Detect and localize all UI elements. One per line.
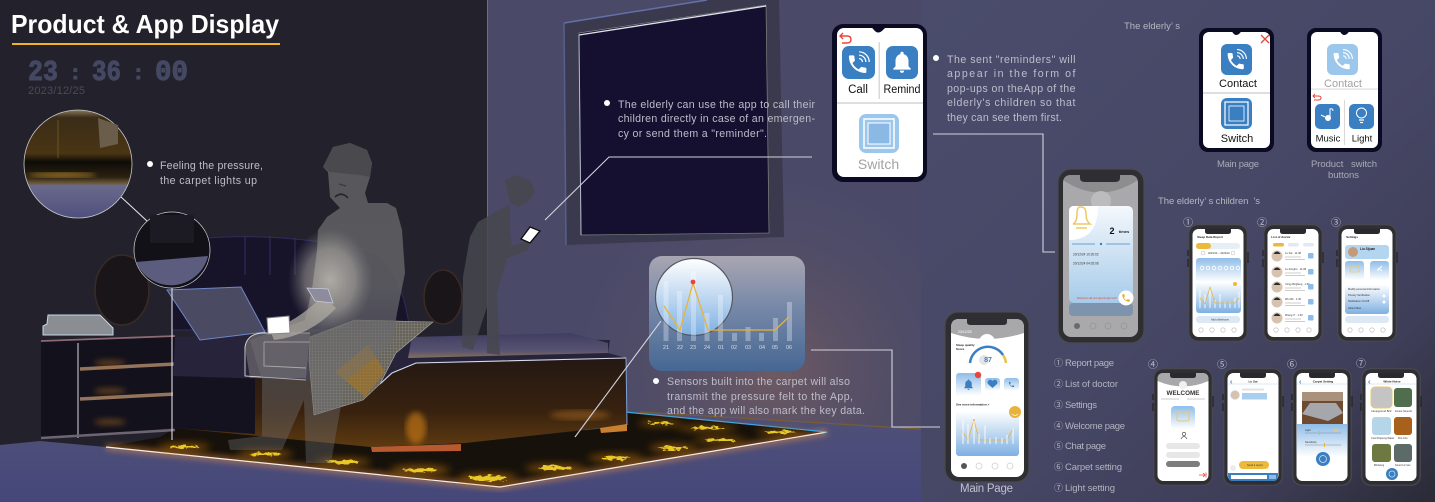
page legend list: ③ [1054, 398, 1063, 411]
phone: carpet setting: Light [1305, 428, 1311, 432]
chart card: pressure data: 05 [772, 345, 778, 351]
title: Product & App Display [11, 9, 280, 39]
phone: report page: Add a Bedroom [1211, 318, 1229, 322]
phone: list of doctor: Lu Zongbo · 11:38 [1285, 267, 1307, 271]
phone: chat page: Lu Sai [1248, 380, 1258, 384]
phone: settings: Notification On/Off [1348, 299, 1369, 303]
phone: elderly main page: Switch [1221, 133, 1253, 145]
arrow: chart to main page [811, 350, 940, 427]
phone: elderly main page: Contact [1219, 78, 1257, 90]
page legend list: ② [1054, 377, 1063, 390]
phone: product switch buttons: Contact [1324, 78, 1362, 90]
phone: carpet setting: Carpet Setting [1313, 380, 1333, 384]
side rail [245, 333, 310, 378]
carpet [106, 412, 827, 487]
books on nightstand [43, 315, 113, 335]
text: reminders: appear in the form of [947, 68, 1076, 80]
chart card: pressure data: 21 [663, 345, 669, 351]
text: carpet lights up: the carpet lights up [160, 175, 257, 187]
phone in hand [521, 227, 540, 243]
chart card: pressure data: 22 [677, 345, 683, 351]
phone: elderly call screen: Switch [858, 156, 899, 172]
phone: light setting: Forest Sounds [1395, 409, 1413, 413]
phone: elderly main page [1199, 28, 1274, 152]
captions: elderly screens: Product switch [1311, 159, 1377, 170]
chart card: pressure data: 04 [759, 345, 765, 351]
phone: carpet setting [1291, 369, 1353, 485]
page legend list [1054, 356, 1125, 494]
phone: list of doctor: List of doctor [1271, 235, 1291, 239]
clock: : [72, 62, 79, 84]
window [564, 0, 784, 245]
page legend list: Chat page [1065, 441, 1106, 452]
phone: product switch buttons [1307, 28, 1382, 152]
text: reminders [933, 54, 1076, 124]
phone: settings: Liu Sijuan [1360, 247, 1375, 251]
phone: popup reminder: 20/12/24 04:02:06 [1073, 262, 1099, 266]
phone: main page: Score [956, 347, 965, 351]
chart card: pressure data: 02 [731, 345, 737, 351]
page legend list: List of doctor [1065, 379, 1118, 390]
standing person [462, 175, 540, 355]
phone: welcome page: WELCOME [1167, 390, 1199, 397]
phone: main page: 20/12/25 [958, 330, 972, 334]
phone: light setting [1360, 369, 1422, 485]
bed [167, 287, 627, 452]
phone: settings: Settings [1346, 235, 1358, 239]
phone: settings: Privacy Verification [1348, 293, 1370, 297]
heading: children's screens: The elderly’ s children 's [1158, 196, 1260, 207]
clock: 36 [92, 56, 121, 89]
seated elderly person [228, 143, 405, 463]
text: elderly call children [604, 99, 815, 140]
chart card: pressure data: 03 [745, 345, 751, 351]
text: sensors: Sensors built into the carpet will also [667, 376, 850, 388]
text: sensors [653, 376, 865, 417]
chart card: pressure data [649, 256, 805, 371]
number labels on phones: ④ [1148, 359, 1158, 371]
phone: carpet setting: Sensitivity [1305, 440, 1317, 444]
phone: product switch buttons: Music [1316, 134, 1341, 144]
text: carpet lights up [147, 160, 263, 187]
page legend list: Carpet setting [1065, 462, 1122, 473]
number labels on phones: ② [1257, 217, 1267, 229]
text: elderly call children: children directly in case of an emergen- [618, 113, 815, 125]
tablet in hand [267, 316, 290, 334]
date: 2023/12/25 [28, 85, 85, 97]
page legend list: Report page [1065, 358, 1114, 369]
page legend list: Welcome page [1065, 421, 1125, 432]
captions: elderly screens [1217, 159, 1377, 181]
page legend list: ⑤ [1054, 439, 1063, 452]
page legend list: ① [1054, 356, 1063, 369]
text: reminders: pop-ups on theApp of the [947, 83, 1076, 95]
number labels on phones: ⑦ [1356, 358, 1366, 370]
headboard [172, 236, 410, 330]
phone: popup reminder: times [1119, 229, 1130, 234]
phone: elderly call screen [832, 24, 927, 182]
chart card: pressure data: 23 [690, 345, 696, 351]
page legend list: Light setting [1065, 483, 1115, 494]
phone: list of doctor: Yang Mingfang · 1:30 [1285, 282, 1310, 286]
phone: light setting: Cool Dripping Water [1371, 436, 1394, 440]
phone: product switch buttons: Light [1352, 134, 1373, 144]
phone: chat page [1222, 369, 1284, 485]
phone: list of doctor: Lu Sai · 11:38 [1285, 251, 1302, 255]
phone: settings: About Mine [1348, 306, 1362, 310]
nightstand [41, 315, 175, 438]
captions: elderly screens: buttons [1328, 170, 1359, 181]
phone: elderly call screen: Remind [884, 84, 920, 96]
phone: list of doctor [1262, 225, 1324, 341]
phone: light setting: Birdsong [1374, 463, 1385, 467]
number labels on phones: ③ [1331, 217, 1341, 229]
speakers [95, 255, 462, 325]
bed base [173, 358, 627, 447]
clock: : [135, 62, 142, 84]
heading: elderly screens: The elderly’ s [1124, 21, 1180, 32]
phone: report page [1187, 225, 1249, 341]
blanket [309, 320, 433, 415]
arrow: app to children's popup [933, 134, 1055, 252]
phone: report page: 2023/12 ~ 2023/12 [1208, 251, 1230, 255]
phone: light setting: White Noise [1383, 380, 1401, 384]
callout: carpet light insets [24, 110, 210, 440]
arrow: phone to app [545, 157, 812, 220]
phone: popup reminder: 20/12/24 10:20:02 [1073, 252, 1099, 256]
text: sensors: and the app will also mark the key data. [667, 405, 865, 417]
text: elderly call children: The elderly can use the app to call their [618, 99, 815, 111]
arrow: carpet to chart [575, 321, 661, 437]
phone: light setting: Fire Fire [1398, 436, 1408, 440]
number labels on phones: ① [1183, 217, 1193, 229]
clock [28, 56, 188, 89]
text: reminders: The sent "reminders" will [947, 54, 1076, 66]
phone: popup reminder: 2 [1109, 226, 1115, 236]
phone: report page: Sleep Data Report [1197, 235, 1223, 239]
number labels on phones: ⑤ [1217, 359, 1227, 371]
phone: settings [1336, 225, 1398, 341]
phone: light setting: Sound of rain [1395, 463, 1411, 467]
phone: light setting: Campground Bird [1371, 409, 1392, 413]
page legend list: ⑥ [1054, 460, 1063, 473]
phone: main page: Sleep quality [956, 343, 975, 347]
text: elderly call children: cy or send them a "reminder". [618, 128, 767, 140]
page legend list: Settings [1065, 400, 1097, 411]
chart card: pressure data: 06 [786, 345, 792, 351]
phone: main page [945, 312, 1029, 482]
text: sensors: transmit the pressure felt to the App, [667, 391, 853, 403]
phone: popup reminder [1058, 169, 1144, 343]
clock: 23 [28, 56, 58, 89]
page legend list: ④ [1054, 419, 1063, 432]
clock: 00 [155, 56, 188, 89]
text: reminders: they can see them first. [947, 112, 1062, 124]
number labels on phones: ⑥ [1287, 359, 1297, 371]
page legend list: ⑦ [1054, 481, 1063, 494]
phone: chat page: Send a report [1247, 463, 1263, 467]
captions: elderly screens: Main page [1217, 159, 1259, 170]
phone: list of doctor: Wu Min · 1:30 [1285, 297, 1302, 301]
phone: main page: 87 [984, 357, 992, 364]
text: reminders: elderly's children so that [947, 97, 1076, 109]
phone: settings: Modify personal information [1348, 287, 1380, 291]
phone: main page: See more information > [956, 402, 990, 406]
phone: welcome page [1152, 369, 1214, 485]
pillow [167, 287, 265, 340]
caption: main page: Main Page [960, 483, 1013, 495]
chart card: pressure data: 24 [704, 345, 710, 351]
phone: elderly call screen: Call [848, 84, 868, 96]
number labels on phones [1148, 217, 1366, 371]
phone: list of doctor: Zhang Yi · 1:30 [1285, 313, 1303, 317]
chart card: pressure data: 01 [718, 345, 724, 351]
text: carpet lights up: Feeling the pressure, [160, 160, 263, 172]
mattress [173, 335, 626, 384]
phone: popup reminder: Would you call your parents right now? [1077, 297, 1118, 300]
